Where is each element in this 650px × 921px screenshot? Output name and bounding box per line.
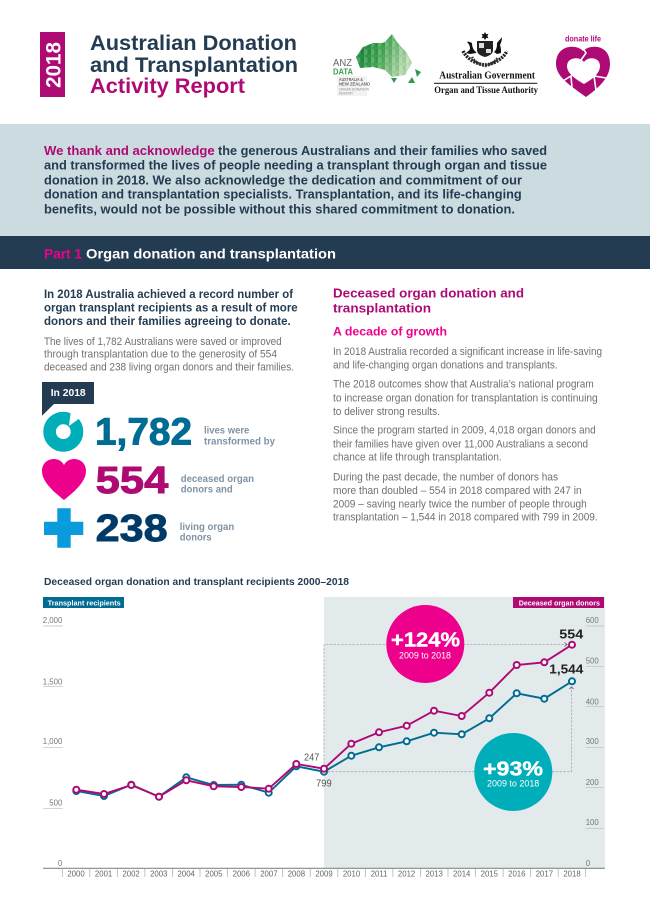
callout: +93%: 2009 to 2018 [487, 779, 539, 790]
year tab: 2018 [42, 42, 66, 88]
right axis labels: 0 [586, 859, 591, 868]
panel: acknowledgement: We thank and acknowledge [44, 143, 215, 158]
panel: In 2018 stats [42, 382, 276, 550]
panel: acknowledgement: benefits, would not be possible without this shared commitment to donation. [44, 201, 515, 216]
section banner: Part 1 [0, 236, 650, 269]
year labels: 2015 [481, 870, 499, 879]
value labels: 1,544 [549, 662, 584, 677]
caption: deceased: donors and [181, 485, 233, 496]
text block: record number: In 2018 Australia achieved a record number of [44, 287, 293, 301]
year labels: 2011 [371, 870, 387, 879]
year labels: 2004 [178, 870, 196, 879]
title: and Transplantation [90, 54, 298, 77]
year labels: 2000 [67, 870, 85, 879]
logo: Australian Government [434, 32, 538, 96]
callout: +124%: +124% [391, 629, 460, 652]
stat: 1,782: 1,782 [95, 411, 192, 453]
year labels: 2018 [563, 870, 581, 879]
icon: ring [50, 409, 82, 445]
body copy: The 2018 outcomes show that Australia’s national program [333, 379, 594, 391]
left axis labels: 1,500 [43, 677, 63, 686]
left axis labels: 1,000 [43, 737, 63, 746]
body copy: chance at life through transplantation. [333, 452, 502, 464]
panel: acknowledgement: donation and transplantation specialists. Transplantation, and its life-changing [44, 187, 522, 202]
legend: transplant recipients: Transplant recipients [48, 599, 121, 608]
text block: deceased organ donation [333, 286, 602, 523]
subheading: A decade of growth [333, 326, 447, 339]
right axis labels: 600 [586, 616, 599, 625]
series: transplant recipients [73, 678, 575, 800]
year labels: 2001 [95, 870, 112, 879]
left axis labels: 500 [49, 798, 63, 807]
right axis labels: 300 [586, 737, 599, 746]
header [40, 32, 610, 98]
body copy: to increase organ donation for transplantation is continuing [333, 393, 598, 405]
panel: acknowledgement [0, 124, 650, 236]
body copy: transplantation – 1,544 in 2018 compared with 799 in 2009. [333, 511, 598, 523]
year labels: 2008 [288, 870, 305, 879]
title: Australian Donation [90, 32, 297, 55]
title [90, 32, 298, 98]
year labels [67, 870, 581, 879]
caption: deceased: deceased organ [181, 474, 254, 485]
title: Activity Report [90, 75, 245, 98]
dashed guides [324, 642, 574, 772]
value labels: 554 [559, 626, 584, 641]
right axis labels: 400 [586, 698, 599, 706]
year labels: 2012 [398, 870, 415, 879]
body copy: more than doubled – 554 in 2018 compared with 247 in [333, 485, 582, 497]
text block: record number: donors and their families agreeing to donate. [44, 314, 291, 328]
text block: record number: through transplantation due to the generosity of 554 [44, 349, 277, 361]
body copy: to deliver strong results. [333, 406, 440, 418]
stat: 238: 238 [96, 508, 168, 550]
logo: ANZDATA: NEW ZEALAND [339, 82, 371, 87]
chart title: Deceased organ donation and transplant recipients 2000–2018 [44, 577, 350, 588]
icon: heart [42, 459, 86, 500]
panel: acknowledgement: the generous Australians and their families who saved [218, 143, 547, 158]
body copy: and life-changing organ donations and transplants. [333, 360, 558, 372]
body copy: their families have given over 11,000 Australians a second [333, 438, 588, 450]
callout: +124% [386, 605, 464, 683]
heading: Deceased organ donation and [333, 286, 524, 301]
caption: lives [204, 426, 276, 448]
icon: cross [44, 508, 83, 548]
logo: ANZDATA: ORGAN DONATION [339, 88, 369, 92]
section banner: Part 1: Organ donation and transplantation [86, 246, 336, 262]
logo: ANZDATA: ANZ [333, 57, 353, 69]
year labels: 2006 [233, 870, 250, 879]
panel: acknowledgement: donation in 2018. We also acknowledge the dedication and commitment of our [44, 172, 522, 187]
text block: record number: organ transplant recipients as a result of more [44, 300, 298, 314]
caption: lives: lives were [204, 426, 250, 437]
logo: ANZDATA: AUSTRALIA & [339, 77, 364, 82]
year labels: 2013 [426, 870, 443, 879]
year labels: 2002 [122, 870, 140, 879]
logo: ANZDATA: DATA [333, 66, 353, 76]
tag: In 2018: In 2018 [51, 388, 86, 399]
right axis labels: 200 [586, 778, 599, 787]
logo: donate life: donate life [565, 34, 601, 44]
value labels: 799 [316, 779, 332, 790]
line chart [43, 597, 605, 879]
year labels: 2014 [453, 870, 471, 879]
stat: 554: 554 [96, 460, 168, 502]
left axis labels [43, 616, 63, 868]
text block: record number: deceased and 238 living organ donors and their families. [44, 361, 294, 373]
year labels: 2005 [205, 870, 223, 879]
caption: deceased [181, 474, 254, 496]
value labels [304, 626, 584, 790]
body copy [333, 346, 602, 523]
text block: record number: The lives of 1,782 Australians were saved or improved [44, 336, 282, 348]
year tab [40, 32, 66, 97]
tag: In 2018 [42, 382, 94, 416]
body copy: 2009 – saving nearly twice the number of people through [333, 498, 587, 510]
right axis labels: 500 [586, 656, 599, 666]
legend: deceased organ donors: Deceased organ donors [519, 599, 600, 608]
year labels: 2016 [508, 870, 525, 879]
left axis labels: 2,000 [43, 616, 63, 625]
callout: +124%: 2009 to 2018 [399, 651, 451, 662]
logo: ANZDATA: REGISTRY [339, 91, 353, 95]
logo: ANZDATA [333, 34, 421, 96]
year labels: 2009 [315, 870, 333, 879]
year labels: 2010 [343, 870, 361, 879]
section banner: Part 1: Part 1 [44, 246, 82, 262]
year labels: 2007 [260, 870, 278, 879]
left axis labels: 0 [58, 859, 63, 868]
right axis labels [586, 616, 599, 868]
value labels: 247 [304, 753, 320, 764]
logo: Australian Government: Organ and Tissue Authority [434, 86, 538, 96]
caption: living: donors [180, 533, 212, 544]
right axis labels: 100 [586, 818, 599, 827]
text block: record number [44, 287, 298, 373]
caption: living [180, 522, 234, 544]
body copy: During the past decade, the number of donors has [333, 471, 558, 483]
body copy: Since the program started in 2009, 4,018 organ donors and [333, 424, 596, 436]
panel: acknowledgement: and transformed the lives of people needing a transplant through organ and tissue [44, 158, 547, 173]
year labels: 2017 [536, 870, 553, 879]
series: deceased organ donors [73, 642, 575, 800]
logo: Australian Government: Australian Government [439, 70, 536, 81]
callout: +93%: +93% [483, 757, 543, 780]
heading: transplantation [333, 301, 431, 316]
caption: lives: transformed by [204, 437, 276, 448]
caption: living: living organ [180, 522, 234, 533]
year labels: 2003 [150, 870, 167, 879]
body copy: In 2018 Australia recorded a significant increase in life-saving [333, 346, 602, 358]
heading [333, 286, 524, 316]
logo: donate life [556, 34, 610, 97]
callout: +93% [474, 733, 552, 811]
